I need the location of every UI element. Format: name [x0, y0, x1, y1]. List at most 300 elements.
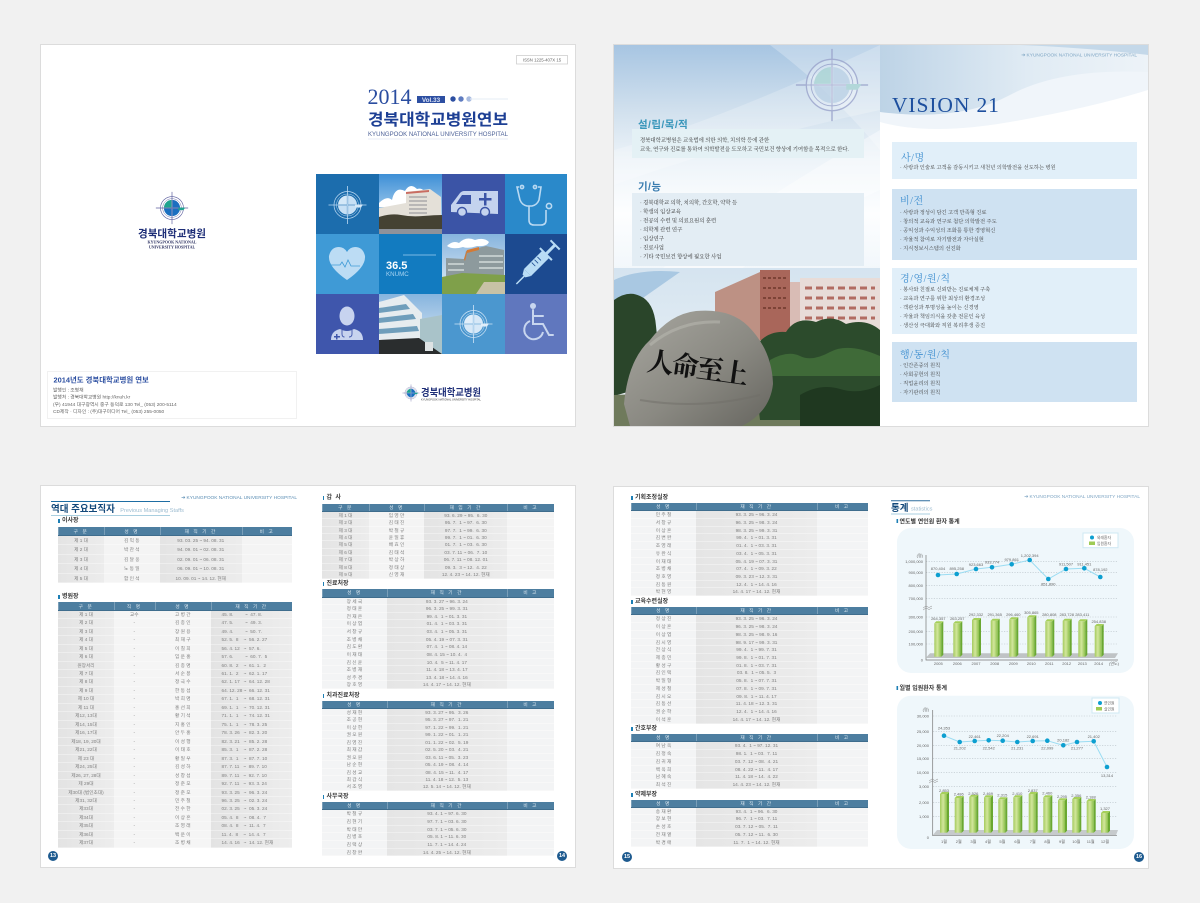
- table: chairman: 93. 03. 25 ~ 94. 08. 31: [177, 538, 224, 543]
- table: dental clinic directors: 김 성 교: [347, 770, 362, 774]
- table: auditors: 제 5 대: [339, 542, 352, 547]
- table: clinical affairs directors: 서 창 규: [347, 629, 362, 634]
- table: auditors: 정 태 상: [389, 565, 404, 570]
- photo: memorial stone: 人命至上: [645, 346, 750, 390]
- table: education directors: 이 상 흔: [656, 624, 671, 629]
- panel: functions: · 진료사업: [640, 244, 664, 252]
- table: hospital directors: 장 원 용: [175, 629, 191, 634]
- table: chairman: 함 인 석: [124, 576, 140, 581]
- table: planning directors: 01. 4. 1 ~ 03. 3. 31: [736, 543, 777, 548]
- panel: management principles: · 교육과 연구를 위한 최상의 환경조성: [900, 294, 985, 302]
- table: pharmacy directors: [631, 800, 868, 846]
- chart: monthly inpatients: 20,000: [917, 743, 930, 748]
- table: clinical affairs directors: 장 호 영: [347, 682, 362, 687]
- chart: monthly inpatients: 30,000: [917, 714, 930, 718]
- icon: doctor: [331, 306, 363, 340]
- table: hospital directors: 이 성 행: [175, 739, 191, 744]
- table: dental clinic directors: 비 고: [523, 702, 538, 707]
- cover title block: Vol.33: [422, 97, 441, 104]
- 36.5 KNUMC tile text: KNUMC: [386, 271, 409, 278]
- photo: main hospital building: [379, 174, 442, 234]
- chart: yearly patients: 283,411: [1075, 612, 1090, 617]
- table: planning directors: 93. 3. 25 ~ 96. 3. 24: [736, 512, 777, 517]
- table: dental clinic directors: 11. 4. 18 ~ 12. 5. 13: [425, 777, 468, 782]
- chart: monthly inpatients: 8월: [1044, 838, 1051, 844]
- table: hospital directors: 이 칠 희: [175, 646, 191, 651]
- chart: yearly patients: 283,728: [1059, 612, 1075, 617]
- table: auditors: 윤 일 휴: [389, 535, 404, 540]
- table: hospital directors: -: [133, 790, 135, 795]
- table: planning directors: 99. 4. 1 ~ 01. 3. 31: [736, 535, 777, 540]
- heading: education director: 교육수련실장: [635, 599, 668, 605]
- chart: monthly inpatients: 2,460: [1042, 790, 1053, 796]
- table: hospital directors: 제 1 대: [79, 612, 93, 617]
- table: clinical affairs directors: 93. 3. 27 ~ 96. 3. 24: [426, 599, 468, 604]
- page: annual report cover: [41, 45, 575, 426]
- table: hospital directors: -: [133, 739, 135, 744]
- table: hospital directors: 02. 3. 25 ~ 05. 3. 24: [222, 806, 267, 811]
- heading: planning director: 기획조정실장: [635, 495, 668, 501]
- table: education directors: 박 일 형: [656, 678, 671, 683]
- table: clinical affairs directors: 조 병 재: [347, 667, 362, 672]
- table: education directors: 제 종 민: [656, 655, 671, 660]
- table: hospital directors: 67. 1. 1 ~ 68. 12. 31: [222, 696, 270, 701]
- table: nursing directors: 김 귀 재: [656, 759, 671, 764]
- photo: university building: [379, 294, 442, 354]
- page number 16: 16: [1136, 854, 1142, 860]
- table: hospital directors: 96. 3. 25 ~ 02. 3. 24: [222, 798, 267, 803]
- table: chairman: 제 3 대: [74, 557, 88, 562]
- table: hospital directors: -: [133, 730, 135, 735]
- chart: monthly inpatients: 7월: [1030, 838, 1036, 844]
- hospital logo: UNIVERSITY HOSPITAL: [149, 244, 196, 250]
- table: hospital directors: 11. 4. 8 ~ 14. 4. 7: [222, 832, 266, 837]
- table: clinical affairs directors: 장 세 국: [347, 599, 362, 604]
- table: clinical affairs directors: 정 태 훈: [347, 606, 362, 611]
- icon: stethoscope: [517, 185, 552, 225]
- chart: yearly patients: 2008: [990, 661, 1000, 666]
- icon: syringe: [510, 238, 562, 290]
- table: hospital directors: 정 준 모: [175, 781, 191, 786]
- table: hospital directors: 제 11 대: [78, 705, 94, 710]
- table: hospital directors: -: [133, 713, 135, 718]
- table: hospital directors: -: [133, 705, 135, 710]
- table: auditors: 구 분: [338, 505, 353, 510]
- table: dental clinic directors: 01. 1. 22 ~ 02. 5. 19: [425, 740, 468, 745]
- chart: yearly patients: 2014: [1094, 661, 1104, 666]
- table: hospital directors: [58, 602, 292, 848]
- table: hospital directors: 08. 4. 8 ~ 11. 4. 7: [222, 823, 266, 828]
- table: auditors: 09. 3. 3 ~ 12. 4. 22: [445, 565, 487, 570]
- table: general affairs directors: 성 명: [347, 803, 362, 808]
- table: hospital directors: 제12, 13대: [75, 713, 97, 718]
- right background with swooshes: [880, 45, 1148, 145]
- chart: yearly patients: 1,000,000: [905, 559, 924, 564]
- chart: monthly inpatients: 2,188: [1086, 794, 1096, 800]
- chart: monthly inpatients: 2,469: [983, 791, 994, 796]
- table: hospital directors: 제 7 대: [79, 671, 93, 676]
- table: dental clinic directors: 최 갑 식: [347, 777, 362, 782]
- table: education directors: 99. 4. 1 ~ 99. 7. 31: [736, 647, 777, 652]
- table: hospital directors: 56. 4. 12 ~ 57. 6.: [222, 646, 261, 651]
- table: auditors: 99. 7. 1 ~ 01. 6. 30: [445, 535, 487, 540]
- table: planning directors: 12. 4. 1 ~ 14. 4. 16: [736, 582, 777, 587]
- chart: monthly inpatients: 2,410: [1012, 791, 1023, 796]
- table: hospital directors: 87. 3. 1 ~ 87. 7. 10: [222, 756, 267, 761]
- chart: yearly patients: 입원환자: [1097, 541, 1111, 546]
- table: hospital directors: 김 종 명: [175, 662, 191, 668]
- table: hospital directors: 조 병 채: [175, 840, 191, 845]
- heading: auditor: 감 사: [326, 495, 341, 501]
- table: planning directors: 조 영 래: [656, 543, 671, 548]
- publication info box: [48, 372, 296, 418]
- table: auditors: 임 영 만: [389, 513, 404, 518]
- table: clinical affairs directors: 비 고: [523, 590, 538, 595]
- table: general affairs directors: 97. 7. 1 ~ 03. 6. 30: [427, 819, 466, 824]
- table: dental clinic directors: 99. 1. 22 ~ 01. 1. 21: [425, 732, 468, 737]
- table: hospital directors: 85. 3. 1 ~ 87. 2. 28: [222, 747, 267, 752]
- table: hospital directors: 제 5 대: [79, 646, 93, 651]
- panel: vision: · 사랑과 정성이 담긴 고객 만족형 진료: [900, 208, 986, 216]
- table: hospital directors: -: [133, 629, 135, 634]
- chart: monthly inpatients: 1,327: [1100, 806, 1111, 811]
- table: hospital directors: 75. 1. 1 ~ 78. 3. 25: [222, 722, 267, 727]
- chart: monthly inpatients: 연인원: [1104, 700, 1115, 706]
- chart: monthly inpatients: 22,204: [997, 733, 1010, 738]
- table: planning directors: 03. 4. 1 ~ 05. 3. 31: [736, 551, 777, 556]
- table: clinical affairs directors: 김 도 환: [347, 644, 362, 649]
- table: hospital directors: 성 명: [175, 604, 190, 609]
- chart: monthly inpatients: 22,542: [983, 746, 996, 750]
- heading: functions: 기/능: [638, 180, 661, 193]
- table: auditors: 제 7 대: [339, 557, 352, 562]
- table: education directors: 05. 8. 1 ~ 07. 7. 31: [736, 678, 777, 683]
- icon mosaic: [316, 174, 567, 354]
- panel: functions: · 경북대학교 의학, 치의학, 간호학, 약학 등: [640, 198, 738, 206]
- panel: functions: [632, 193, 864, 266]
- panel: management principles: · 객관성과 투명성을 높이는 신경영: [900, 303, 979, 311]
- chart: monthly inpatients: 2월: [956, 838, 962, 844]
- table: nursing directors: 11. 4. 18 ~ 14. 4. 22: [735, 774, 778, 779]
- table: hospital directors: 제36대: [79, 832, 93, 837]
- panel: functions: · 기타 국민보건 향상에 필요한 사업: [640, 252, 721, 260]
- chart: monthly inpatients: 13,314: [1101, 773, 1114, 778]
- table: clinical affairs directors: 김 신 윤: [347, 660, 362, 665]
- table: auditors: 김 태 진: [389, 520, 404, 525]
- table: general affairs directors: 05. 8. 1 ~ 11. 6. 30: [427, 834, 466, 839]
- table: education directors: 11. 4. 18 ~ 12. 3. 31: [736, 701, 777, 706]
- chart: monthly inpatients: 2,315: [997, 792, 1008, 798]
- table: hospital directors: 백 운 이: [175, 832, 191, 837]
- chart: monthly inpatients: 20,182: [1057, 738, 1070, 742]
- table: nursing directors: 03. 7. 12 ~ 08. 4. 21: [735, 759, 778, 764]
- heading: general affairs director: 사무국장: [326, 794, 349, 800]
- table: auditors: 95. 7. 1 ~ 97. 6. 30: [445, 520, 487, 525]
- table: general affairs directors: 93. 4. 1 ~ 97. 6. 30: [427, 811, 466, 816]
- table: pharmacy directors: 93. 4. 1 ~ 96. 6. 30: [736, 809, 777, 814]
- chart: monthly inpatients: 2,295: [1057, 794, 1068, 799]
- table: auditors: 제 2 대: [339, 520, 352, 525]
- table: clinical affairs directors: 전 재 은: [347, 614, 362, 619]
- page number 13: 13: [50, 853, 56, 859]
- panel: vision: [892, 189, 1137, 260]
- table: hospital directors: 64. 12. 28 ~ 66. 12. 31: [222, 688, 270, 693]
- chart: monthly inpatients: 5월: [999, 838, 1006, 844]
- table: pharmacy directors: 손 성 호: [656, 824, 671, 829]
- chart: monthly inpatients: [897, 696, 1134, 849]
- chart: monthly inpatients: 실인원: [1104, 706, 1115, 711]
- hospital logo: 경북대학교병원: [138, 227, 206, 240]
- chart: yearly patients: 264,357: [931, 616, 946, 621]
- chart: yearly patients: 933,774: [985, 560, 1000, 564]
- heading: monthly inpatients: 월별 입원환자 통계: [900, 684, 947, 692]
- table: education directors: 09. 8. 1 ~ 11. 4. 17: [736, 694, 777, 699]
- table: chairman: 10. 09. 01 ~ 14. 12. 현재: [176, 576, 226, 581]
- table: hospital directors: 김 종 인: [175, 620, 191, 625]
- table: hospital directors: 93. 3. 25 ~ 96. 3. 24: [222, 790, 267, 795]
- table: clinical affairs directors: 05. 4. 19 ~ 07. 3. 31: [426, 637, 468, 642]
- table: clinical affairs directors: 99. 4. 1 ~ 01. 3. 31: [427, 614, 467, 619]
- table: clinical affairs directors: 96. 3. 25 ~ 99. 3. 31: [426, 606, 468, 611]
- table: auditors: 박 상 하: [389, 557, 404, 562]
- table: clinical affairs directors: 10. 4. 5 ~ 11. 4. 17: [427, 660, 467, 665]
- table: pharmacy directors: 03. 7. 12 ~ 05. 7. 11: [735, 824, 778, 829]
- table: education directors: 전 상 식: [656, 647, 671, 652]
- panel: vision: 비/전: [900, 194, 924, 207]
- table: general affairs directors: 03. 7. 1 ~ 05. 6. 30: [427, 827, 466, 832]
- table: planning directors: 김 변 완: [656, 535, 671, 540]
- page: staff tables and statistics: [614, 487, 1148, 868]
- heading: statistics: statistics: [911, 506, 933, 512]
- table: hospital directors: 71. 1. 1 ~ 74. 12. 31: [222, 713, 270, 718]
- table: pharmacy directors: 05. 7. 12 ~ 11. 6. 30: [735, 832, 778, 837]
- table: nursing directors: 14. 4. 23 ~ 14. 12. 현재: [733, 782, 780, 787]
- table: education directors: 07. 8. 1 ~ 09. 7. 31: [736, 686, 777, 691]
- table: education directors: 96. 3. 25 ~ 98. 3. 24: [736, 624, 777, 629]
- chart: monthly inpatients: 10,000: [917, 770, 930, 775]
- heading: founding purpose: 설/립/목/적: [638, 118, 688, 131]
- table: hospital directors: -: [133, 654, 135, 659]
- panel: management principles: [892, 268, 1137, 334]
- table: pharmacy directors: 박 경 애: [656, 840, 671, 845]
- table: dental clinic directors: 97. 1. 22 ~ 99. 1. 21: [425, 725, 468, 730]
- table: hospital directors: 홍 선 희: [175, 705, 191, 710]
- table: hospital directors: -: [133, 823, 135, 828]
- chart: monthly inpatients: 2,853: [939, 788, 950, 793]
- table: planning directors: 14. 4. 17 ~ 14. 12. 현재: [733, 589, 780, 594]
- table: hospital directors: 78. 3. 26 ~ 82. 3. 20: [222, 730, 267, 735]
- chart: yearly patients: 296,460: [1006, 612, 1021, 617]
- chart: monthly inpatients: 3,000: [919, 784, 930, 789]
- publication info box: 2014년도 경북대학교병원 연보: [54, 376, 149, 384]
- table: hospital directors: 49. 4. ~ 50. 7.: [222, 629, 262, 634]
- table: dental clinic directors: 남 순 현: [347, 762, 362, 767]
- table: hospital directors: 제 10 대: [78, 696, 94, 701]
- chart: yearly patients: 911,451: [1077, 562, 1092, 566]
- table: auditors: 12. 4. 23 ~ 14. 12. 현재: [442, 572, 490, 577]
- chart: yearly patients: 895,258: [949, 566, 965, 571]
- page number 13: [48, 851, 58, 861]
- table: dental clinic directors: 조 공 현: [347, 717, 362, 722]
- table: hospital directors: 제 8 대: [79, 679, 93, 684]
- table: hospital directors: -: [133, 806, 135, 811]
- chart: yearly patients: 979,861: [1004, 557, 1020, 562]
- table: planning directors: 05. 4. 19 ~ 07. 3. 31: [736, 559, 777, 564]
- icon: wheelchair: [524, 303, 553, 339]
- table: chairman: 노 동 일: [124, 566, 140, 571]
- running header: ➔ KYUNGPOOK NATIONAL UNIVERSITY HOSPITAL: [1024, 494, 1140, 500]
- table: clinical affairs directors: 이 상 엽: [347, 621, 362, 626]
- table: dental clinic directors: 93. 3. 27 ~ 95. 3. 26: [425, 710, 468, 715]
- table: hospital directors: 제 2 대: [79, 620, 93, 625]
- table: education directors: 03. 8. 1 ~ 05. 5. 3: [737, 670, 776, 675]
- table: chairman: 제 2 대: [74, 547, 88, 552]
- table: nursing directors: 98. 1. 1 ~ 03. 7. 11: [736, 751, 777, 756]
- table: hospital directors: 민 주 철: [175, 798, 191, 803]
- table: pharmacy directors: 재 직 기 간: [740, 801, 773, 806]
- chart: yearly patients: 305,865: [1024, 610, 1039, 615]
- table: hospital directors: 김 성 하: [175, 764, 191, 769]
- table: hospital directors: -: [133, 781, 135, 786]
- table: hospital directors: -: [133, 722, 135, 727]
- table: pharmacy directors: 11. 7. 1 ~ 14. 12. 현재: [733, 840, 780, 845]
- chart: yearly patients: 외래환자: [1097, 535, 1111, 540]
- table: planning directors: 07. 4. 1 ~ 09. 3. 22: [736, 566, 777, 571]
- chart: monthly inpatients: 22,691: [1027, 734, 1040, 739]
- page number 14: [557, 851, 567, 861]
- panel: action principles: · 인간존중의 원칙: [900, 361, 940, 369]
- table: chairman: 성 명: [124, 529, 139, 534]
- table: pharmacy directors: 비 고: [835, 801, 850, 806]
- panel: mission: · 사랑과 인술로 고객을 감동시키고 새천년 의학발전을 선도하는 병원: [900, 163, 1056, 171]
- chart: yearly patients: 2013: [1078, 661, 1088, 666]
- table: dental clinic directors: 성 재 현: [347, 710, 362, 715]
- table: hospital directors: 제 4 대: [79, 637, 93, 642]
- small logo bottom: KYUNGPOOK NATIONAL UNIVERSITY HOSPITAL: [421, 398, 481, 402]
- chart: monthly inpatients: 2,526: [968, 791, 979, 796]
- table: clinical affairs directors: [322, 589, 554, 688]
- table: education directors: 이 석 훈: [656, 717, 671, 722]
- table: planning directors: 성 명: [656, 504, 671, 509]
- 36.5 KNUMC tile text: 36.5: [386, 260, 407, 272]
- table: education directors: 김 동 선: [656, 701, 671, 706]
- chart: yearly patients: 923,663: [969, 562, 984, 567]
- table: auditors: 박 철 규: [389, 528, 404, 533]
- small logo bottom: [402, 384, 481, 402]
- table: pharmacy directors: 96. 7. 1 ~ 03. 7. 11: [736, 816, 777, 821]
- table: nursing directors: 비 고: [835, 735, 850, 740]
- chart: monthly inpatients: 9월: [1059, 838, 1065, 844]
- heading: nursing director: 간호부장: [635, 726, 657, 732]
- title: VISION 21: VISION 21: [892, 93, 1000, 117]
- table: general affairs directors: [322, 802, 554, 856]
- ISSN box: ISSN 1225-407X 15: [523, 58, 562, 63]
- table: hospital directors: 69. 1. 1 ~ 70. 12. 31: [222, 705, 270, 710]
- chart: yearly patients: 1,202,394: [1021, 553, 1039, 558]
- chart: monthly inpatients: 22,099: [1041, 746, 1054, 750]
- cover title block: 경북대학교병원연보: [368, 111, 508, 129]
- panel: functions: · 전공의 수련 및 의료요원의 훈련: [640, 216, 716, 224]
- table: hospital directors: 원장서리: [77, 662, 95, 668]
- table: planning directors: 98. 3. 25 ~ 99. 3. 31: [736, 528, 777, 533]
- table: hospital directors: 52. 5. 8 ~ 56. 2. 27: [222, 637, 267, 642]
- watermark emblem: [796, 49, 868, 121]
- table: nursing directors: 백 옥 희: [656, 767, 671, 772]
- table: hospital directors: 62. 1. 17 ~ 64. 12. 28: [222, 679, 270, 684]
- table: education directors: 이 상 엽: [656, 632, 671, 637]
- table: dental clinic directors: 재 직 기 간: [431, 702, 463, 707]
- table: dental clinic directors: 김 영 진: [347, 740, 362, 745]
- table: hospital directors: 전 수 한: [175, 806, 191, 811]
- table: hospital directors: 정 극 수: [175, 679, 191, 684]
- table: general affairs directors: 비 고: [523, 803, 538, 808]
- table: dental clinic directors: 02. 5. 20 ~ 03. 4. 21: [425, 747, 468, 752]
- table: nursing directors: 김 정 숙: [656, 751, 671, 756]
- table: hospital directors: 제31, 32대: [75, 798, 97, 803]
- panel: action principles: · 직업윤리의 원칙: [900, 379, 940, 387]
- table: nursing directors: 여 남 옥: [656, 743, 671, 748]
- table: auditors: 비 고: [523, 505, 538, 510]
- table: clinical affairs directors: 성 주 경: [347, 675, 362, 680]
- panel: mission: [892, 142, 1137, 179]
- table: hospital directors: 한 동 섭: [175, 688, 191, 693]
- chart: yearly patients: 2007: [972, 661, 981, 666]
- cover title block: KYUNGPOOK NATIONAL UNIVERSITY HOSPITAL: [368, 131, 508, 138]
- chart: yearly patients: 200,000: [909, 629, 924, 634]
- table: hospital directors: 성 창 섭: [175, 773, 191, 778]
- table: hospital directors: 제35대: [79, 823, 93, 828]
- chart: monthly inpatients: 15,000: [917, 756, 930, 761]
- table: education directors: 성 명: [656, 608, 671, 613]
- table: hospital directors: 최 재 구: [175, 637, 191, 642]
- table: general affairs directors: 박 철 규: [347, 811, 362, 816]
- table: hospital directors: 교수: [130, 612, 139, 617]
- table: hospital directors: 황 일 우: [175, 756, 191, 761]
- table: general affairs directors: 김 현 기: [347, 819, 362, 824]
- 36.5 KNUMC tile text: [386, 255, 436, 278]
- table: clinical affairs directors: 조 병 채: [347, 637, 362, 642]
- table: chairman: [58, 527, 292, 582]
- heading: previous managing staffs: 역대 주요보직자 Previous Managing Staffs: [51, 504, 184, 515]
- chart: yearly patients: 263,257: [950, 616, 965, 621]
- left background with swooshes: [614, 45, 880, 270]
- table: planning directors: 박 현 영: [656, 589, 671, 594]
- chart: monthly inpatients: 2,837: [1028, 788, 1038, 793]
- table: hospital directors: -: [133, 696, 135, 701]
- table: hospital directors: 구 분: [79, 604, 93, 609]
- table: education directors: 권 순 학: [656, 709, 671, 714]
- hospital logo: [138, 192, 206, 250]
- chart: monthly inpatients: 10월: [1072, 838, 1081, 844]
- table: auditors: 제 8 대: [339, 565, 352, 570]
- table: dental clinic directors: 05. 4. 19 ~ 08. 4. 14: [425, 762, 468, 767]
- table: auditors: 배 효 인: [389, 542, 404, 547]
- chart: monthly inpatients: 0: [927, 835, 930, 840]
- table: hospital directors: 직 명: [127, 604, 142, 609]
- table: planning directors: 김 동 원: [656, 582, 671, 587]
- table: nursing directors: 성 명: [656, 735, 671, 740]
- table: chairman: 06. 09. 01 ~ 10. 08. 31: [177, 566, 224, 571]
- panel: founding purpose: [632, 129, 864, 158]
- table: planning directors: 조 병 채: [656, 566, 671, 571]
- table: clinical affairs directors: 01. 4. 1 ~ 03. 3. 31: [427, 621, 467, 626]
- publication info box: 발행인 : 조병채: [53, 386, 83, 394]
- table: hospital directors: 안 두 홍: [175, 730, 191, 735]
- page: purpose and vision spread: [614, 45, 1148, 426]
- table: education directors: 황 성 구: [656, 663, 671, 668]
- table: hospital directors: 박 희 명: [175, 696, 191, 701]
- table: nursing directors: 08. 4. 22 ~ 11. 4. 17: [735, 767, 778, 772]
